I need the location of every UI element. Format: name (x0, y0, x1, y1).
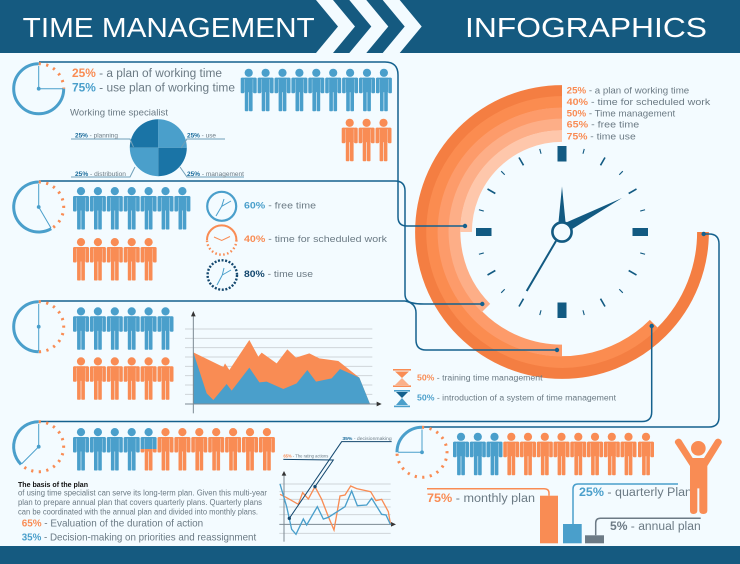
basis percentages: 65% - Evaluation of the duration of action (22, 518, 203, 530)
people: orange row (73, 238, 157, 280)
area chart (185, 311, 382, 413)
icon: small blue clock (207, 192, 236, 221)
ring legend: 65% - free time (567, 120, 639, 130)
line chart (279, 436, 396, 542)
time percentages (244, 200, 387, 280)
icon: clock 65 percent (14, 422, 64, 472)
bar: quarterly plan (563, 484, 692, 543)
basis percentages: 35% - Decision-making on priorities and reassignment (22, 532, 256, 544)
basis text block: of using time specialist can serve its long-term plan. Given this multi-year (18, 488, 267, 498)
icon: clock 75 percent (14, 64, 64, 114)
icon: clock 25 percent (397, 427, 447, 477)
pie labels (75, 134, 244, 178)
icon: clock 60 percent (14, 182, 64, 232)
basis text block: can be coordinated with the annual plan and divided into monthly plans. (18, 507, 258, 516)
icon: small orange clock (207, 225, 236, 255)
pie chart (130, 119, 187, 176)
icon: chevron arrows (316, 0, 422, 53)
big clock face (476, 146, 648, 318)
basis percentages (22, 518, 256, 544)
time percentages: 40% - time for scheduled work (244, 234, 387, 245)
pie leader lines (71, 139, 244, 177)
panel: free time and scheduled work (14, 182, 387, 290)
people: blue row (73, 187, 190, 230)
people: orange row (342, 119, 392, 161)
ring legend: 25% - a plan of working time (567, 85, 689, 95)
bar: monthly plan: 75% - monthly plan (427, 493, 535, 505)
pie labels: 25% - planning (75, 134, 118, 140)
people: blue row (73, 307, 174, 350)
pie labels: 25% - use (187, 134, 217, 140)
time percentages: 60% - free time (244, 200, 316, 211)
heading: working time specialist: Working time specialist (70, 108, 168, 119)
people: mixed row (453, 433, 654, 475)
panel: training (14, 302, 617, 413)
ring legend (567, 85, 711, 141)
training labels: 50% - training time management (417, 374, 543, 383)
line chart: 65% - The rating actions (283, 453, 329, 459)
pie labels: 25% - management (187, 172, 244, 178)
panel: basis of the plan (14, 422, 396, 544)
line chart: 35% - decisionmaking (342, 436, 392, 442)
plan percentages (72, 68, 235, 95)
basis text block: plan to prepare annual plan that covers quarterly plans. Quarterly plans (18, 498, 262, 507)
ring legend: 40% - time for scheduled work (567, 97, 711, 107)
people: orange row (73, 357, 174, 400)
bar: annual plan (585, 518, 701, 543)
plan percentages: 25% - a plan of working time (72, 68, 222, 80)
training labels (417, 374, 617, 403)
connector lines (39, 62, 719, 427)
people: mixed row (73, 428, 275, 470)
time percentages: 80% - time use (244, 269, 313, 280)
icon: small navy clock (208, 260, 237, 290)
ring legend: 75% - time use (567, 131, 636, 141)
icon: orange hourglass (393, 369, 411, 387)
icon: cheering person (675, 439, 722, 514)
basis text block: The basis of the plan (18, 480, 88, 489)
panel: working time plan (14, 64, 392, 178)
big clock rings (421, 91, 703, 373)
people: blue row (241, 69, 392, 111)
header band (0, 0, 740, 53)
ring legend: 50% - Time management (567, 109, 676, 119)
title: time management: TIME MANAGEMENT (23, 12, 315, 43)
panel: monthly quarterly annual plan (397, 427, 722, 543)
training labels: 50% - introduction of a system of time management (417, 394, 617, 403)
bar: monthly plan (427, 489, 558, 543)
pie labels: 25% - distribution (75, 172, 126, 178)
clock hands (527, 186, 622, 291)
title: infographics: INFOGRAPHICS (465, 12, 707, 43)
icon: half clock (14, 302, 64, 352)
bar: quarterly plan: 25% - quarterly Plan (579, 487, 692, 499)
basis text block (18, 480, 267, 516)
icon: blue hourglass (394, 390, 410, 407)
plan percentages: 75% - use plan of working time (72, 83, 235, 95)
bar: annual plan: 5% - annual plan (610, 521, 701, 533)
footer band (0, 546, 740, 564)
